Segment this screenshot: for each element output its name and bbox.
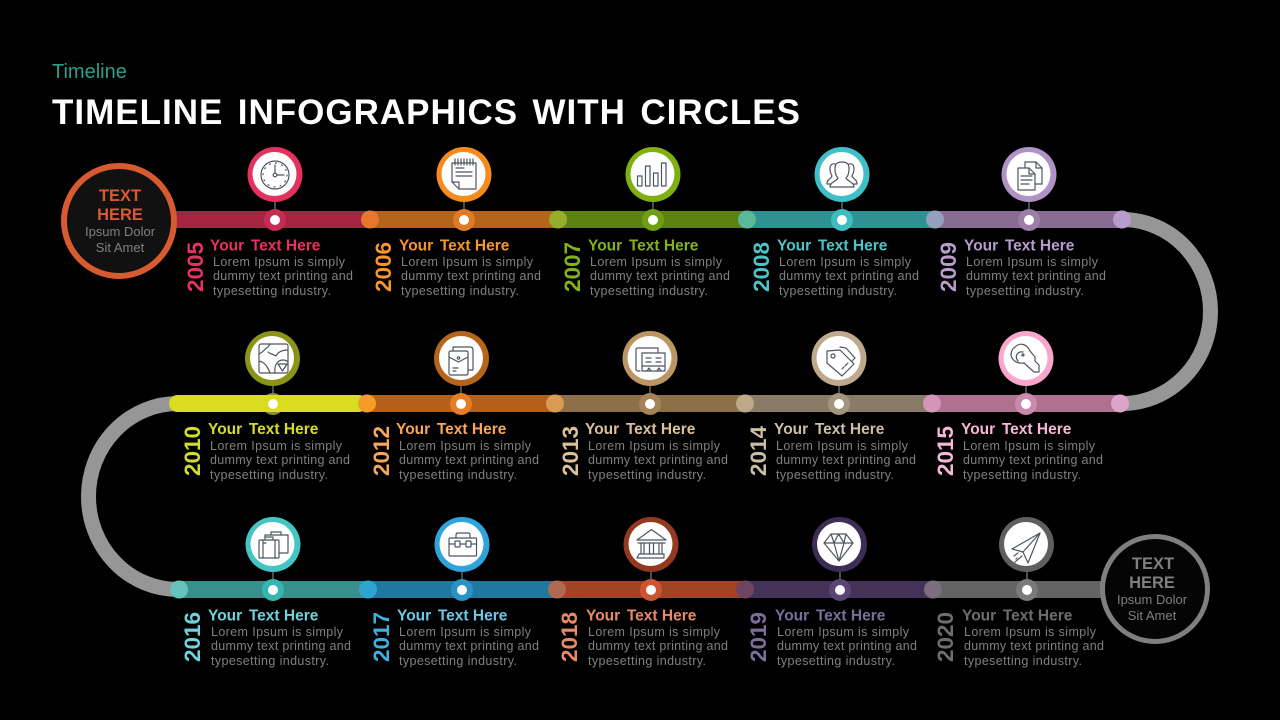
body text [776, 439, 916, 482]
milestone 2014 [746, 331, 916, 482]
year: 2012 [369, 426, 394, 476]
icon: clock [248, 147, 302, 202]
body text: dummy text printing and [588, 453, 728, 467]
node marker [264, 202, 286, 231]
body text: dummy text printing and [399, 639, 539, 653]
year: 2019 [746, 612, 771, 662]
body text: typesetting industry. [399, 654, 517, 668]
heading: Your Text Here [396, 421, 507, 438]
body text [963, 439, 1103, 482]
body text [779, 255, 919, 298]
body text [966, 255, 1106, 298]
start circle: Sit Amet [96, 240, 145, 255]
node marker [829, 572, 851, 601]
heading: Your Text Here [774, 421, 885, 438]
body text: Lorem Ipsum is simply [964, 625, 1097, 639]
year: 2018 [557, 612, 582, 662]
body text [213, 255, 353, 298]
heading: Your Text Here [961, 421, 1072, 438]
milestone 2015 [933, 331, 1103, 482]
body text: dummy text printing and [211, 639, 351, 653]
node marker [1018, 202, 1040, 231]
year: 2016 [180, 612, 205, 662]
heading: Your Text Here [585, 421, 696, 438]
milestone 2019 [746, 517, 917, 668]
node marker [642, 202, 664, 231]
body text: dummy text printing and [213, 269, 353, 283]
icon: key [998, 331, 1054, 386]
icon: people [814, 147, 870, 202]
body text: Lorem Ipsum is simply [399, 625, 532, 639]
icon: cards [622, 331, 678, 386]
milestone 2018 [557, 517, 728, 668]
body text: Lorem Ipsum is simply [777, 625, 910, 639]
icon: map [245, 331, 300, 386]
milestone 2009 [936, 147, 1106, 298]
body text: typesetting industry. [588, 468, 706, 482]
body text: dummy text printing and [966, 269, 1106, 283]
start circle: Ipsum Dolor [85, 224, 156, 239]
node marker [260, 386, 286, 415]
body text: dummy text printing and [588, 639, 728, 653]
node marker [451, 572, 473, 601]
milestone 2017 [369, 517, 539, 668]
heading: Your Text Here [586, 608, 697, 624]
timeline track [88, 210, 1210, 598]
icon: bank [624, 517, 678, 572]
body text: typesetting industry. [964, 654, 1082, 668]
year: 2006 [371, 242, 396, 292]
body text: dummy text printing and [401, 269, 541, 283]
body text: dummy text printing and [777, 639, 917, 653]
body text: Lorem Ipsum is simply [401, 255, 534, 269]
milestone 2012 [369, 331, 539, 482]
year: 2020 [933, 612, 958, 662]
milestone 2007 [560, 147, 730, 298]
year: 2010 [180, 426, 205, 476]
year: 2014 [746, 425, 771, 476]
body text: Lorem Ipsum is simply [590, 255, 723, 269]
start circle: HERE [97, 206, 143, 224]
body text: dummy text printing and [210, 453, 350, 467]
node marker [450, 386, 472, 415]
body text: typesetting industry. [966, 284, 1084, 298]
year: 2007 [560, 242, 585, 292]
heading: Your Text Here [210, 238, 321, 254]
body text: typesetting industry. [213, 284, 331, 298]
icon: diamond [812, 517, 867, 572]
body text: typesetting industry. [399, 468, 517, 482]
end circle: HERE [1129, 574, 1175, 592]
body text: typesetting industry. [779, 284, 897, 298]
body text: dummy text printing and [963, 453, 1103, 467]
body text: typesetting industry. [588, 654, 706, 668]
body text [399, 625, 539, 668]
milestone 2006 [371, 147, 541, 298]
year: 2005 [183, 242, 208, 292]
title: TIMELINE INFOGRAPHICS WITH CIRCLES [52, 93, 801, 132]
body text: dummy text printing and [399, 453, 539, 467]
icon: suitcases [246, 517, 300, 572]
heading: Your Text Here [964, 238, 1075, 254]
node marker [640, 572, 662, 601]
heading: Your Text Here [588, 238, 699, 254]
body text: Lorem Ipsum is simply [213, 255, 346, 269]
end circle [1102, 536, 1208, 642]
body text: Lorem Ipsum is simply [211, 625, 344, 639]
heading: Your Text Here [962, 608, 1073, 624]
body text: typesetting industry. [590, 284, 708, 298]
body text: Lorem Ipsum is simply [966, 255, 1099, 269]
body text [210, 439, 350, 482]
node marker [639, 386, 661, 415]
body text [399, 439, 539, 482]
body text: Lorem Ipsum is simply [588, 625, 721, 639]
icon: bar chart [626, 147, 680, 202]
body text: typesetting industry. [401, 284, 519, 298]
subtitle: Timeline [52, 61, 127, 83]
year: 2008 [749, 242, 774, 292]
body text: dummy text printing and [776, 453, 916, 467]
body text: dummy text printing and [964, 639, 1104, 653]
body text [588, 625, 728, 668]
heading: Your Text Here [777, 238, 888, 254]
body text: Lorem Ipsum is simply [776, 439, 909, 453]
body text [588, 439, 728, 482]
heading: Your Text Here [397, 608, 508, 624]
node marker [1015, 386, 1037, 415]
icon: envelope [434, 331, 489, 386]
body text: typesetting industry. [963, 468, 1081, 482]
node marker [831, 202, 853, 231]
body text: Lorem Ipsum is simply [588, 439, 721, 453]
body text [964, 625, 1104, 668]
icon: paper plane [999, 517, 1054, 572]
body text: typesetting industry. [210, 468, 328, 482]
milestone 2008 [749, 147, 919, 298]
milestone 2005 [183, 147, 353, 298]
body text [777, 625, 917, 668]
node marker [1016, 572, 1038, 601]
milestone 2016 [180, 517, 351, 668]
heading: Your Text Here [775, 608, 886, 624]
body text: typesetting industry. [211, 654, 329, 668]
body text: Lorem Ipsum is simply [399, 439, 532, 453]
body text: dummy text printing and [779, 269, 919, 283]
body text: Lorem Ipsum is simply [210, 439, 343, 453]
body text [401, 255, 541, 298]
end circle: Sit Amet [1128, 608, 1177, 623]
icon: notebook [436, 147, 492, 202]
body text [590, 255, 730, 298]
node marker [453, 202, 475, 231]
heading: Your Text Here [208, 608, 319, 624]
milestone 2020 [933, 517, 1104, 668]
heading: Your Text Here [208, 421, 319, 438]
body text: dummy text printing and [590, 269, 730, 283]
icon: documents [1002, 147, 1056, 202]
end circle: TEXT [1132, 555, 1174, 573]
year: 2009 [936, 242, 961, 292]
year: 2015 [933, 426, 958, 476]
icon: briefcase [434, 517, 490, 572]
icon: price tag [812, 331, 866, 386]
year: 2017 [369, 612, 394, 662]
end circle: Ipsum Dolor [1117, 592, 1188, 607]
body text: typesetting industry. [776, 468, 894, 482]
milestone 2010 [180, 331, 350, 482]
body text: Lorem Ipsum is simply [963, 439, 1096, 453]
node marker [262, 572, 284, 601]
start circle: TEXT [99, 187, 141, 205]
body text: typesetting industry. [777, 654, 895, 668]
body text [211, 625, 351, 668]
body text: Lorem Ipsum is simply [779, 255, 912, 269]
start circle [64, 166, 174, 276]
year: 2013 [558, 426, 583, 476]
node marker [828, 386, 850, 415]
heading: Your Text Here [399, 238, 510, 254]
milestone 2013 [558, 331, 728, 482]
